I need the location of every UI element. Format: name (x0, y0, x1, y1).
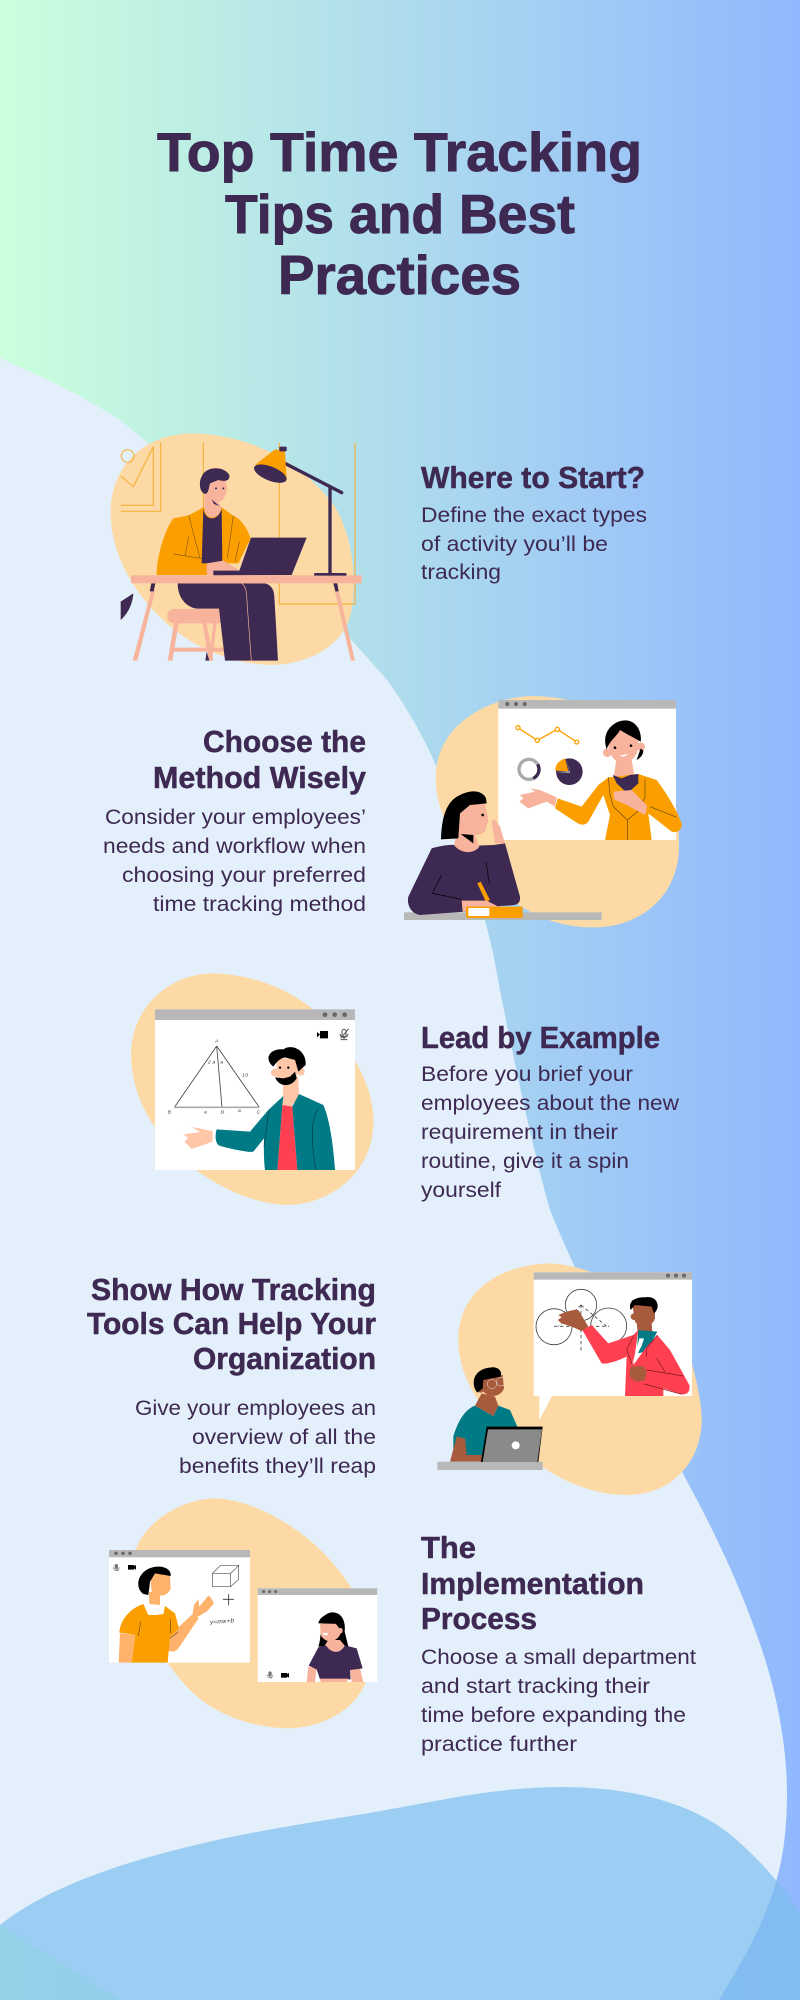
triangle diagram: a (220, 1059, 223, 1065)
presenter (558, 1297, 690, 1396)
neck (204, 495, 222, 517)
body: routine, give it a spin (421, 1150, 629, 1173)
heading: Process (421, 1602, 537, 1636)
heading: Organization (193, 1342, 376, 1376)
body: requirement in their (421, 1121, 618, 1144)
heading: The (421, 1531, 476, 1565)
body: time tracking method (153, 893, 366, 916)
left video window (109, 1550, 250, 1663)
woman in orange shirt (119, 1567, 214, 1663)
heading: Show How Tracking (91, 1273, 376, 1307)
illustration: man working at desk with laptop and lamp (111, 433, 362, 665)
video window (498, 700, 676, 840)
line chart (516, 726, 579, 744)
wall frames (121, 443, 355, 604)
teacher (183, 1047, 335, 1170)
body: and start tracking their (421, 1675, 650, 1698)
body: time before expanding the (421, 1704, 686, 1727)
heading: Method Wisely (153, 761, 366, 795)
title (157, 121, 642, 306)
heading: Choose the (203, 725, 366, 759)
equation: y=mx+b (209, 1618, 234, 1626)
stool (167, 609, 224, 661)
trousers (178, 583, 278, 661)
triangle diagram: C (257, 1109, 261, 1115)
laptop (213, 538, 307, 575)
jacket seams (173, 515, 239, 562)
speech window (534, 1272, 692, 1420)
title: Practices (278, 244, 521, 306)
body: choosing your preferred (122, 864, 366, 887)
face (204, 474, 227, 503)
camera icon (317, 1031, 328, 1038)
text block: choose the method wisely (103, 725, 366, 916)
title: Tips and Best (225, 183, 575, 245)
triangle diagram: D (221, 1109, 225, 1115)
body: employees about the new (421, 1092, 680, 1115)
orange blob (133, 1498, 372, 1728)
orange blob (131, 973, 373, 1205)
jacket (157, 507, 251, 575)
body: Consider your employees’ (105, 806, 366, 829)
desk (131, 575, 362, 661)
illustration: teacher explaining triangle on video (131, 973, 373, 1205)
triangle diagram (168, 1039, 261, 1115)
black shirt (202, 508, 222, 563)
heading: Tools Can Help Your (87, 1307, 376, 1341)
triangle diagram: a (238, 1108, 241, 1114)
body (103, 806, 366, 916)
heading: Where to Start? (421, 461, 645, 495)
body: Give your employees an (135, 1397, 376, 1420)
video window (155, 1009, 355, 1170)
eyes (215, 487, 224, 489)
orange blob (458, 1263, 702, 1495)
presenter (519, 720, 682, 840)
triangle diagram: 10 (242, 1073, 248, 1079)
bottom wave (0, 1787, 800, 2000)
body (421, 504, 647, 584)
text block: lead by example (421, 1021, 680, 1202)
orange blob (111, 433, 354, 665)
student at laptop (437, 1367, 543, 1470)
triangle diagram: A (214, 1039, 219, 1045)
hair (200, 468, 229, 494)
text block: where to start (421, 461, 647, 584)
right video window (258, 1588, 377, 1682)
illustration: presenter with circles and student at laptop (437, 1263, 702, 1495)
triangle diagram: 2a (207, 1059, 216, 1065)
cube drawing (212, 1565, 239, 1587)
body: benefits they’ll reap (179, 1455, 376, 1478)
body: Before you brief your (421, 1063, 633, 1086)
body: tracking (421, 561, 501, 584)
body: needs and workflow when (103, 835, 366, 858)
heading (421, 1531, 644, 1636)
circle diagram (536, 1289, 627, 1352)
hand (207, 561, 238, 575)
heading: Implementation (421, 1567, 644, 1601)
illustration: student watching online presenter (404, 696, 682, 927)
body: overview of all the (192, 1426, 376, 1449)
plant leaf (121, 593, 133, 620)
body: practice further (421, 1733, 577, 1756)
body: of activity you’ll be (421, 533, 608, 556)
body: yourself (421, 1179, 501, 1202)
triangle diagram: a (204, 1109, 207, 1115)
student (404, 791, 602, 920)
illustration: two people on a video call (109, 1498, 377, 1728)
body (421, 1063, 680, 1202)
body (135, 1397, 376, 1478)
mic and camera icons (113, 1564, 136, 1571)
muted mic icon (340, 1029, 349, 1040)
body: Define the exact types (421, 504, 647, 527)
heading (87, 1273, 376, 1376)
heading (153, 725, 366, 795)
pie chart (555, 757, 583, 785)
desk lamp (252, 447, 347, 576)
title: Top Time Tracking (157, 121, 642, 183)
heading: Lead by Example (421, 1021, 660, 1055)
woman in purple top (307, 1612, 363, 1682)
text block: the implementation process (421, 1531, 696, 1756)
plus sign (223, 1594, 234, 1605)
body (421, 1646, 696, 1756)
text block: show how tracking tools can help (87, 1273, 376, 1478)
body: Choose a small department (421, 1646, 696, 1669)
orange blob (436, 696, 679, 927)
mic and camera icons (267, 1671, 289, 1678)
donut chart (519, 759, 539, 779)
triangle diagram: B (168, 1109, 172, 1115)
